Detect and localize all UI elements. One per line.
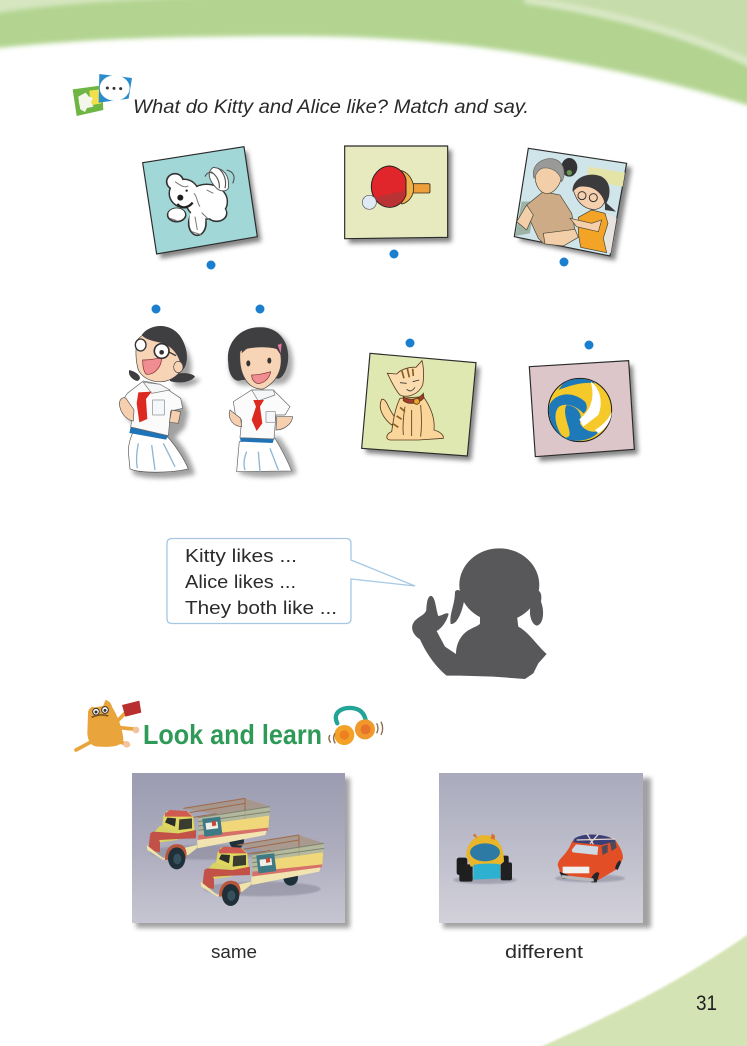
speech text: Alice likes ...	[185, 571, 296, 592]
icon: puzzle and speech bubble	[73, 74, 132, 116]
card: cat	[362, 353, 480, 461]
toy car: yellow and blue buggy	[453, 833, 517, 884]
card: grandfather and girl photo	[514, 148, 632, 261]
card: dog	[143, 147, 261, 259]
card: table tennis paddle	[345, 146, 452, 243]
girls: Alice and Kitty	[119, 326, 297, 478]
icon: ball	[362, 195, 376, 209]
icon: cat	[380, 361, 443, 440]
figure: Alice with glasses	[119, 326, 201, 478]
speech text: Kitty likes ...	[185, 545, 297, 566]
speech text: They both like ...	[185, 597, 337, 618]
page number: 31	[696, 992, 717, 1015]
caption: different: different	[505, 941, 583, 962]
icon: paddle	[371, 166, 430, 207]
section heading: Look and learn	[76, 700, 383, 750]
icon: orange cat with book	[76, 700, 141, 750]
caption: same: same	[211, 941, 257, 962]
toy truck front	[201, 835, 324, 906]
icon: headphones	[329, 708, 383, 745]
figure: Kitty with short hair	[228, 327, 297, 477]
card: volleyball	[529, 361, 638, 461]
silhouette of girl	[412, 548, 547, 679]
title: What do Kitty and Alice like? Match and say.	[133, 96, 529, 118]
figure: grandfather	[517, 159, 578, 246]
toy car: red car with flag roof	[555, 833, 625, 882]
photo: two same toy trucks	[132, 773, 350, 928]
figure: girl in orange	[570, 175, 616, 253]
matching dots	[152, 250, 594, 350]
photo: two different toy cars	[439, 773, 651, 928]
icon: ball	[548, 378, 612, 442]
heading text: Look and learn	[143, 719, 322, 750]
top green swoosh banner	[0, 0, 747, 108]
toy truck back	[147, 798, 270, 869]
bottom right green corner	[520, 928, 747, 1046]
speech bubble	[167, 538, 415, 624]
icon: white fluffy dog	[167, 167, 234, 235]
speech text	[185, 545, 337, 618]
